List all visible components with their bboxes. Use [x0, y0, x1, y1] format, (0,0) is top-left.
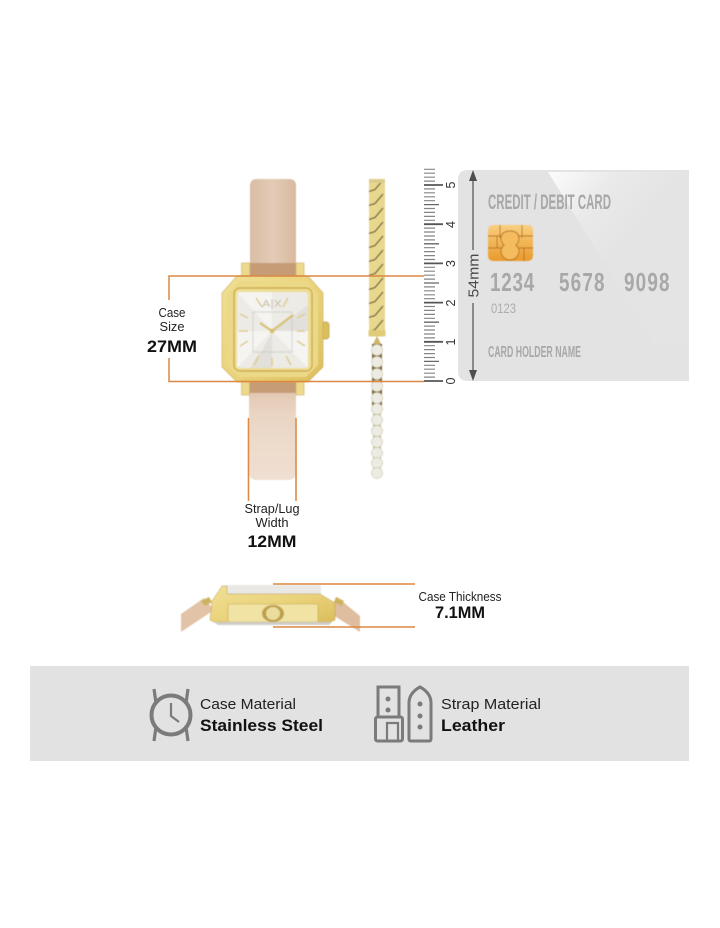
card body	[458, 170, 689, 381]
case size bracket	[169, 276, 424, 382]
hour markers	[239, 298, 305, 366]
case material text: Case Material	[200, 697, 296, 713]
upper strap	[250, 179, 296, 272]
ruler numbers	[444, 181, 458, 384]
crystal strand	[371, 336, 383, 479]
watch front view	[222, 179, 329, 480]
ruler numbers: 2	[444, 299, 458, 306]
54mm dimension arrow	[466, 170, 482, 381]
dial sunray	[237, 292, 308, 368]
card numbers: 1234	[490, 268, 535, 297]
ruler numbers: 5	[444, 181, 458, 188]
side case	[210, 586, 335, 622]
hands	[260, 315, 293, 331]
case thickness label: Case Thickness	[418, 590, 502, 604]
strap width label: 12MM	[248, 532, 296, 551]
card title: CREDIT / DEBIT CARD	[488, 191, 611, 214]
card numbers	[490, 268, 671, 297]
dial inner track	[253, 312, 292, 352]
case size label	[147, 305, 197, 356]
strap material text: Strap Material	[441, 697, 541, 713]
side band	[228, 604, 318, 622]
orange measure lines	[169, 276, 424, 627]
panel background	[30, 666, 689, 761]
side crown	[262, 605, 284, 622]
upper strap shadow	[250, 263, 296, 276]
case material text: Stainless Steel	[200, 716, 323, 735]
credit card reference	[458, 170, 689, 381]
card holder name: CARD HOLDER NAME	[488, 344, 581, 361]
ruler numbers: 0	[444, 377, 458, 384]
strap material text: Leather	[441, 716, 505, 735]
ruler	[424, 169, 458, 384]
bracelet	[368, 179, 386, 479]
side bottom	[214, 622, 332, 625]
case size label: 27MM	[147, 337, 197, 356]
card chip	[488, 225, 533, 261]
strap width lines	[248, 418, 296, 501]
side strap	[181, 598, 214, 632]
herringbone chain	[368, 179, 386, 336]
54mm dimension arrow: 54mm	[466, 254, 482, 298]
strap width label	[244, 501, 300, 551]
lower strap shadow	[249, 382, 296, 393]
strap width label: Width	[256, 515, 288, 530]
card glare	[548, 172, 611, 215]
case	[222, 276, 323, 382]
card small number: 0123	[491, 300, 516, 316]
lower strap	[249, 382, 296, 480]
strap material text	[441, 697, 541, 735]
icon: watch	[152, 689, 190, 741]
watch side view	[181, 585, 360, 632]
side crystal	[225, 585, 321, 594]
card numbers: 9098	[624, 268, 671, 297]
card numbers: 5678	[559, 268, 606, 297]
crown	[322, 322, 329, 339]
case thickness label	[418, 590, 502, 622]
case thickness label: 7.1MM	[435, 603, 485, 622]
case size label: Case	[158, 305, 186, 320]
ruler numbers: 4	[444, 221, 458, 228]
strap width label: Strap/Lug	[244, 501, 300, 516]
ruler numbers: 1	[444, 338, 458, 345]
panel: materials	[30, 666, 689, 761]
case size label: Size	[160, 319, 184, 334]
case material text	[200, 697, 323, 735]
lugs	[242, 263, 304, 395]
side strap keepers	[201, 597, 344, 606]
case thickness lines	[273, 584, 415, 627]
bezel	[234, 288, 312, 371]
logo: A|X	[262, 298, 282, 310]
icon: strap and buckle	[376, 687, 431, 741]
dial	[237, 292, 308, 368]
ruler numbers: 3	[444, 260, 458, 267]
